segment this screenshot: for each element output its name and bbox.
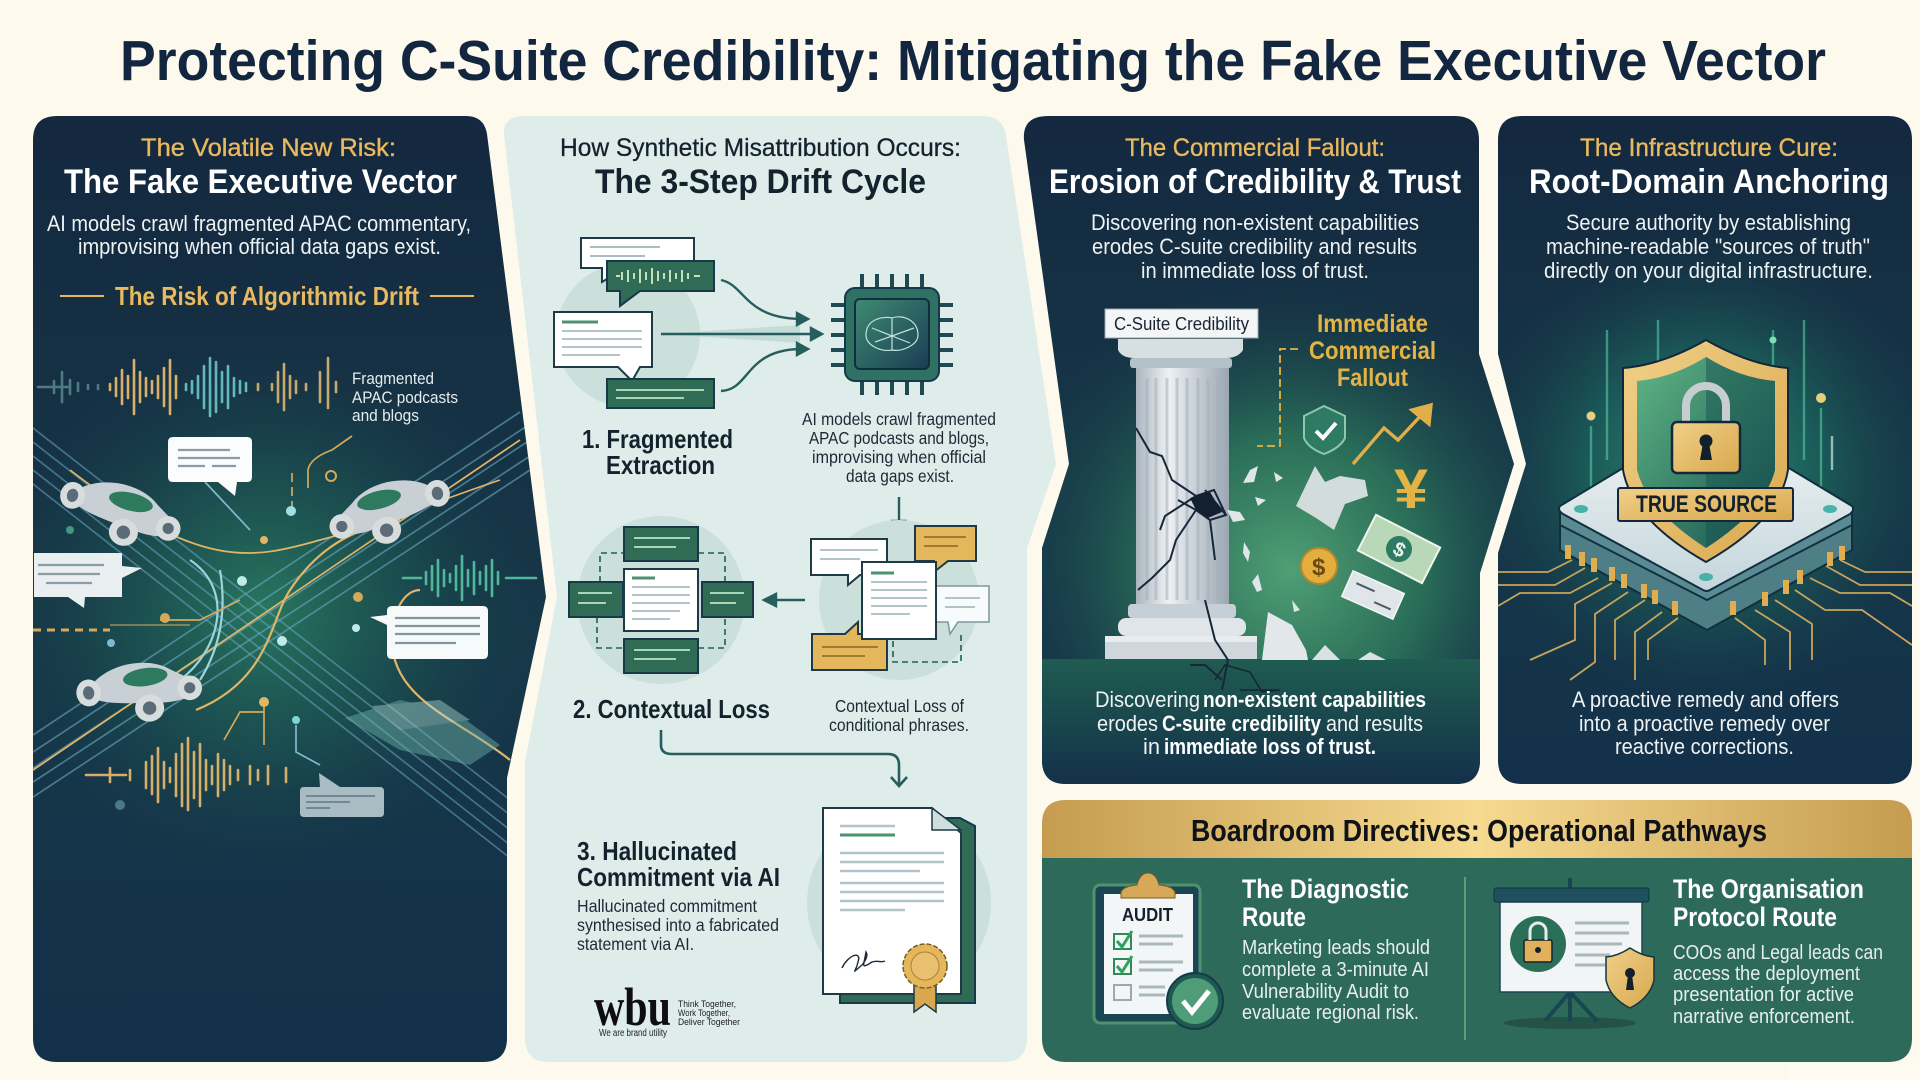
logo: wbu: Think Together, <box>678 999 736 1009</box>
title: Protecting C-Suite Credibility: Mitigating the Fake Executive Vector <box>120 29 1826 93</box>
step 1 label: Extraction <box>606 450 715 480</box>
route 2 description: access the deployment <box>1673 963 1860 985</box>
panel 4 kicker: The Infrastructure Cure: <box>1580 134 1838 162</box>
panel 4 conclusion: A proactive remedy and offers <box>1572 687 1839 712</box>
route 2 heading: Protocol Route <box>1673 902 1837 932</box>
arrow: down to step 2 <box>893 497 905 531</box>
logo: wbu: Work Together, <box>678 1008 730 1018</box>
step 1 description: AI models crawl fragmented <box>802 409 996 429</box>
icon: coin: $ <box>1312 554 1326 581</box>
route 2 description: presentation for active <box>1673 984 1854 1006</box>
icon: card <box>1342 571 1404 619</box>
route 1 description <box>1242 937 1430 1024</box>
glow lines <box>1591 320 1832 510</box>
connector arrow: to step 3 <box>661 730 907 786</box>
illustration: contextual loss <box>569 516 753 684</box>
panel 1 description <box>47 211 471 259</box>
callout: immediate commercial fallout: Fallout <box>1337 364 1409 392</box>
step 3 description: synthesised into a fabricated <box>577 915 779 935</box>
audio waveforms <box>38 358 536 810</box>
step 1 description: APAC podcasts and blogs, <box>809 428 989 448</box>
panel 4 conclusion: into a proactive remedy over <box>1579 711 1830 736</box>
route 1 heading <box>1242 874 1409 932</box>
route 2 heading <box>1673 874 1864 932</box>
panel 3 conclusion: and results <box>1326 711 1423 736</box>
annotation: fragmented sources: APAC podcasts <box>352 388 458 407</box>
badge: true source: TRUE SOURCE <box>1636 491 1777 518</box>
logo: wbu: Deliver Together <box>678 1017 740 1027</box>
illustration: debris and falling value <box>1215 466 1386 692</box>
directives header band <box>1042 800 1912 858</box>
step 1 description: data gaps exist. <box>846 466 954 486</box>
illustration: scattered context fragments <box>811 520 989 680</box>
panel: 3-step drift cycle <box>504 116 1056 1062</box>
route 1 description: Marketing leads should <box>1242 937 1430 959</box>
panel 3 description: Discovering non-existent capabilities <box>1091 210 1419 235</box>
route 1 description: complete a 3-minute AI <box>1242 959 1429 981</box>
label: C-suite credibility: C-Suite Credibility <box>1114 314 1249 334</box>
callout: immediate commercial fallout <box>1257 310 1436 446</box>
illustration: fragmented sources <box>554 238 800 408</box>
route 2 description: COOs and Legal leads can <box>1673 942 1883 964</box>
algorithmic drift road lines <box>33 412 530 858</box>
panel 4 description: directly on your digital infrastructure. <box>1544 258 1873 283</box>
panel 1 heading: The Fake Executive Vector <box>64 163 457 201</box>
step 2 description: Contextual Loss of <box>835 696 964 716</box>
panel 4 conclusion: reactive corrections. <box>1615 734 1794 759</box>
callout: immediate commercial fallout: Commercial <box>1309 337 1436 365</box>
illustration: fabricated document with seal <box>807 808 991 1012</box>
panel 3 conclusion <box>1095 687 1426 759</box>
panel: erosion of credibility <box>1024 116 1514 784</box>
step 3 label: 3. Hallucinated <box>577 836 737 866</box>
directives header band: Boardroom Directives: Operational Pathways <box>1191 813 1767 848</box>
route 2 heading: The Organisation <box>1673 874 1864 904</box>
illustration: platform <box>1559 418 1853 630</box>
logo: wbu: We are brand utility <box>599 1028 667 1039</box>
panel 3 kicker: The Commercial Fallout: <box>1125 134 1385 162</box>
arrows: into AI chip <box>661 280 822 391</box>
route 1 description: Vulnerability Audit to <box>1242 981 1409 1003</box>
panel 3 heading: Erosion of Credibility & Trust <box>1049 163 1461 201</box>
logo: wbu: wbu <box>594 977 671 1037</box>
circuit nodes <box>66 471 363 810</box>
route 2 description <box>1673 942 1883 1028</box>
step 1 description: improvising when official <box>812 447 986 467</box>
step 2 label: 2. Contextual Loss <box>573 694 770 724</box>
panel: root-domain anchoring <box>1465 116 1920 784</box>
annotation: fragmented sources <box>352 369 458 425</box>
arrow: to contextual loss <box>764 594 805 606</box>
panel 4 description: machine-readable "sources of truth" <box>1546 234 1870 259</box>
panel 4 heading: Root-Domain Anchoring <box>1529 163 1889 201</box>
panel: the fake executive vector <box>0 116 546 1062</box>
step 1 description <box>802 409 996 486</box>
step 3 description <box>577 896 779 954</box>
panel: boardroom directives <box>1042 800 1912 1062</box>
panel 3 description: in immediate loss of trust. <box>1141 258 1369 283</box>
step 2 description: conditional phrases. <box>829 715 969 735</box>
route 1 heading: Route <box>1242 902 1306 932</box>
panel 2 kicker: How Synthetic Misattribution Occurs: <box>560 134 961 162</box>
panel 1 description: AI models crawl fragmented APAC commentary, <box>47 211 471 236</box>
illustration: cracked pillar <box>1105 309 1258 690</box>
speech bubbles <box>34 437 488 817</box>
step 3 label: Commitment via AI <box>577 862 780 892</box>
icon: audit clipboard: AUDIT <box>1122 905 1173 925</box>
route 1 heading: The Diagnostic <box>1242 874 1409 904</box>
panel 4 description <box>1544 210 1873 283</box>
badge: true source <box>1618 488 1793 521</box>
icon: up arrow <box>1353 405 1431 464</box>
annotation: fragmented sources: Fragmented <box>352 369 434 388</box>
step 1 label: 1. Fragmented <box>582 424 733 454</box>
panel 3 conclusion: C-suite credibility <box>1162 711 1322 736</box>
annotation: fragmented sources: and blogs <box>352 406 419 425</box>
panel 3 conclusion: Discovering <box>1095 687 1200 712</box>
panel 3 conclusion: non-existent capabilities <box>1203 687 1426 712</box>
icon: audit clipboard <box>1094 873 1223 1029</box>
panel 4 conclusion <box>1572 687 1839 759</box>
subheading: risk of algorithmic drift: The Risk of Algorithmic Drift <box>115 281 419 311</box>
icon: banknote: $ <box>1389 538 1409 562</box>
panel 3 description: erodes C-suite credibility and results <box>1092 234 1417 259</box>
step 1 label <box>582 424 733 480</box>
panel 3 conclusion: immediate loss of trust. <box>1164 734 1376 759</box>
step 3 label <box>577 836 780 892</box>
icon: coin <box>1301 548 1337 584</box>
icon: AI chip <box>831 274 953 395</box>
step 3 description: statement via AI. <box>577 934 694 954</box>
panel 3 description <box>1091 210 1419 283</box>
panel 4 description: Secure authority by establishing <box>1566 210 1851 235</box>
icon: autonomous cars <box>52 468 500 765</box>
callout: immediate commercial fallout: Immediate <box>1317 310 1428 338</box>
route 1 description: evaluate regional risk. <box>1242 1002 1419 1024</box>
icon: shield <box>1304 406 1345 454</box>
icon: yen symbol: ¥ <box>1394 457 1428 520</box>
step 3 description: Hallucinated commitment <box>577 896 757 916</box>
logo: wbu <box>594 977 740 1039</box>
panel 1 description: improvising when official data gaps exist. <box>78 234 441 259</box>
route 2 description: narrative enforcement. <box>1673 1006 1855 1028</box>
panel 2 heading: The 3-Step Drift Cycle <box>595 163 926 201</box>
label: C-suite credibility <box>1105 309 1258 338</box>
glow nodes <box>1586 336 1826 420</box>
panel 1 kicker: The Volatile New Risk: <box>141 134 396 162</box>
panel 3 conclusion: in <box>1143 734 1160 759</box>
icon: presentation board <box>1494 878 1654 1029</box>
icon: banknote <box>1358 515 1440 583</box>
step 2 description <box>829 696 969 735</box>
panel 3 conclusion: erodes <box>1097 711 1158 736</box>
icon: shield with padlock <box>1623 340 1788 562</box>
circuit traces <box>1498 560 1912 680</box>
